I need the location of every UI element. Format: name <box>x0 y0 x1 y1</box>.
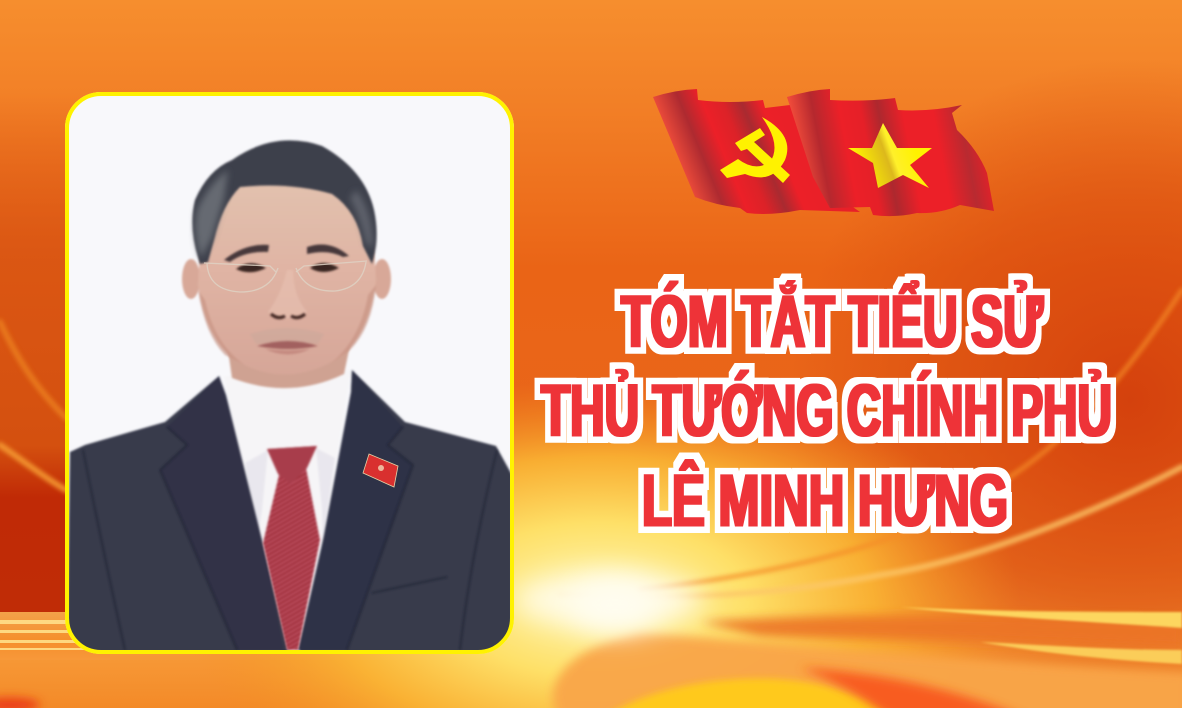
title <box>541 280 1112 542</box>
jacket seams <box>83 427 497 650</box>
lower right orange band <box>700 615 1182 648</box>
hammer and sickle <box>720 117 790 183</box>
icon: party flag <box>653 89 860 214</box>
bottom streaks <box>900 607 1182 628</box>
necktie <box>263 446 320 650</box>
flags <box>653 89 994 216</box>
yellow photo border <box>67 94 512 652</box>
eyeglasses <box>204 261 367 292</box>
icon: national flag <box>787 89 994 216</box>
head <box>180 184 392 359</box>
panel: portrait photo <box>65 92 514 660</box>
yellow star <box>848 123 932 188</box>
photo background <box>65 92 514 654</box>
title line 3: LÊ MINH HƯNG <box>642 459 1008 542</box>
eyes, brows, nose and mouth <box>224 244 349 354</box>
hair <box>192 140 377 264</box>
neck <box>228 345 350 388</box>
portrait of Lê Minh Hưng <box>67 140 512 660</box>
left streaks <box>0 612 110 660</box>
light arcs <box>0 290 1182 597</box>
icon: lapel pin <box>363 454 398 487</box>
central sun glow <box>513 574 703 626</box>
shirt <box>245 449 335 531</box>
suit jacket <box>67 370 512 660</box>
